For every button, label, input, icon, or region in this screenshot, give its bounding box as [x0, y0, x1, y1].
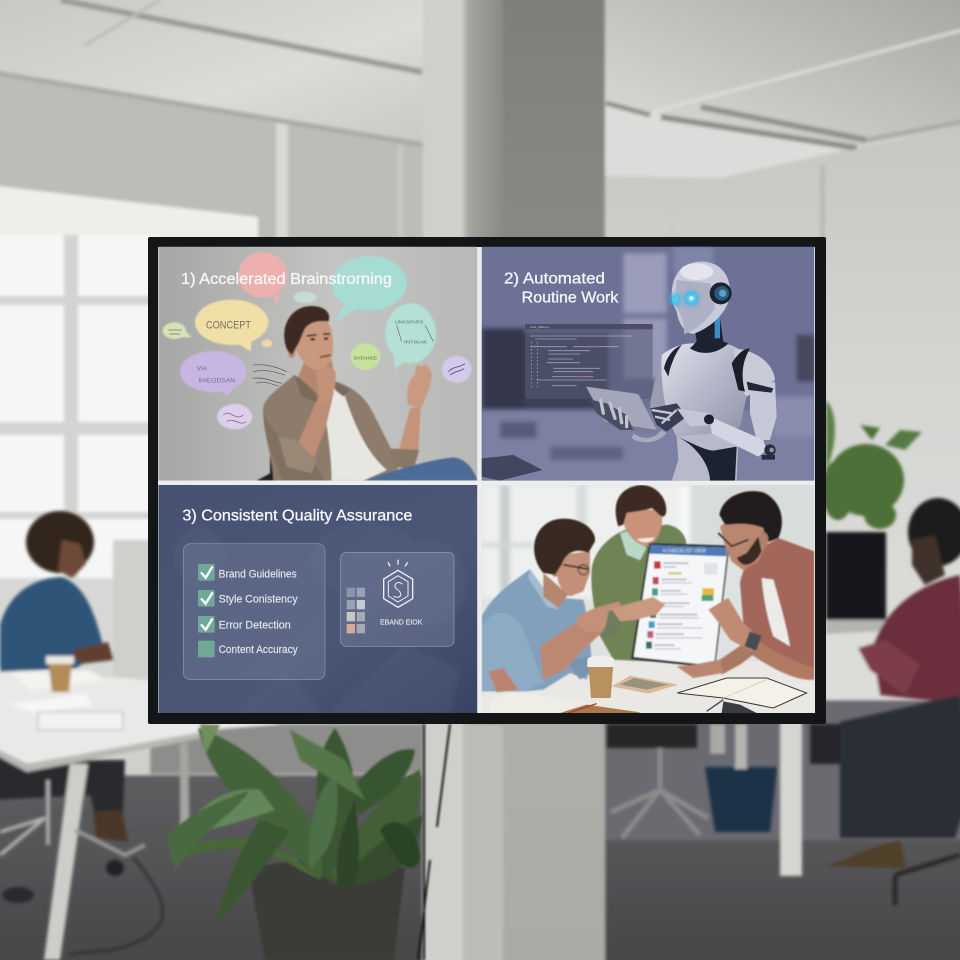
- neck: [298, 360, 335, 397]
- speech bubbles: [163, 252, 472, 429]
- potted plant: [166, 724, 450, 960]
- head: [294, 316, 333, 370]
- jeans: [363, 457, 477, 481]
- item: brand guidelines: Brand Guidelines: [219, 568, 297, 580]
- title: 3) Consistent Quality Assurance: [182, 507, 412, 524]
- panel 2: automated routine work: Routine Work: [522, 290, 619, 307]
- head: [672, 262, 730, 334]
- pot: [248, 860, 405, 960]
- tablet: [586, 387, 657, 430]
- bubble writing: UNKSPARS: [395, 319, 423, 324]
- bubble writing: IHIEODSAN: [198, 378, 235, 385]
- upper arm: [750, 382, 777, 440]
- wall-mounted screen frame: [148, 237, 826, 724]
- thinking man: [257, 306, 477, 481]
- shirt torso: [263, 375, 398, 481]
- coffee cup: [587, 656, 614, 698]
- item: style consistency: Style Conistency: [219, 593, 298, 605]
- right wall: [605, 125, 960, 700]
- table: [482, 661, 814, 715]
- hand under tablet: [590, 399, 633, 430]
- man in rust shirt: [677, 491, 814, 680]
- ceiling left: [0, 0, 430, 145]
- monitor: [113, 540, 151, 686]
- checklist rows: [646, 561, 717, 649]
- brand kit card: [341, 552, 454, 646]
- hand on chin: [316, 368, 336, 396]
- blurred office behind robot: [482, 247, 815, 483]
- checklist card: [183, 544, 325, 680]
- bubble writing: [168, 319, 465, 423]
- notebooks: [490, 678, 807, 715]
- checklist tablet: 4 CHECKLIST VIEW: [663, 548, 707, 554]
- shoulder: [733, 348, 775, 397]
- hair: [284, 306, 329, 355]
- person: [872, 575, 960, 705]
- monitor: [826, 532, 886, 622]
- desk: [826, 630, 940, 696]
- item: content accuracy: Content Accuracy: [219, 644, 298, 656]
- desk: [0, 668, 280, 764]
- woman in green sweater: [591, 485, 687, 663]
- faint background figure: [413, 680, 454, 710]
- chair: [256, 456, 275, 481]
- item: style consistency: [198, 590, 298, 607]
- collars: [294, 376, 317, 402]
- empty chair: [607, 724, 697, 748]
- raised hand: [407, 364, 432, 408]
- coffee: [48, 660, 72, 692]
- woman's pointing hand: [612, 597, 665, 621]
- window: [0, 185, 258, 240]
- person: [0, 577, 104, 672]
- blurred colleague at left desk: [0, 511, 280, 960]
- t-shirt: [323, 388, 387, 481]
- screen white dividers: [158, 247, 815, 713]
- title: 1) Accelerated Brainstrorning: [181, 271, 392, 288]
- floor: [0, 775, 960, 960]
- blurred colleague at right desk: [607, 400, 960, 905]
- left wall: [0, 75, 425, 240]
- eyes and mouth: [307, 334, 330, 336]
- bright window behind team: [482, 485, 815, 598]
- chair: [895, 855, 960, 905]
- front hand: [650, 403, 687, 432]
- bubble writing: CONCEPT: [206, 319, 251, 331]
- item: error detection: Error Detection: [219, 619, 291, 631]
- under-desk darkness: [0, 755, 125, 815]
- item: brand guidelines: [198, 564, 297, 581]
- shoes: [93, 810, 128, 842]
- neck: [690, 318, 728, 353]
- plant on right: [822, 400, 922, 529]
- chair and cable: [0, 780, 48, 855]
- code window: [525, 324, 653, 399]
- panel 1: accelerated brainstorming: [158, 247, 477, 481]
- brand kit card: EBAND EIOK: [380, 617, 423, 626]
- code window: code_editor.py: [530, 325, 550, 329]
- item: content accuracy: [198, 641, 298, 657]
- panel 2: automated routine work: [482, 247, 815, 483]
- man in denim shirt: [482, 519, 620, 692]
- torso: [661, 343, 747, 437]
- bucket: [705, 767, 777, 832]
- title: 2) Automated: [504, 270, 605, 287]
- panel 3: consistent quality assurance: [158, 485, 477, 713]
- patterned coaster: [612, 676, 678, 694]
- leaves: [166, 724, 422, 925]
- pelvis: [672, 433, 738, 481]
- forearm to chin: [297, 392, 334, 458]
- eyes: [670, 294, 681, 305]
- cables: [418, 724, 450, 960]
- left sleeve: [263, 407, 325, 481]
- swatch grid: [347, 588, 365, 633]
- bubble writing: INTIKAK: [404, 339, 427, 344]
- ceiling right: [605, 0, 960, 145]
- hexagon logo: [384, 560, 413, 607]
- robot: [586, 262, 777, 481]
- bubble writing: DATAHICE: [354, 355, 377, 360]
- back arm: [650, 376, 666, 410]
- pillar: [423, 0, 463, 960]
- bubble writing: VIA: [197, 366, 208, 373]
- forearm: [710, 417, 767, 457]
- tablet on desk: [482, 455, 543, 481]
- checklist tablet: [631, 543, 729, 668]
- ear: [710, 282, 732, 304]
- item: error detection: [198, 616, 291, 633]
- panel 4: team reviewing checklist: [482, 485, 815, 715]
- raised forearm: [399, 407, 421, 453]
